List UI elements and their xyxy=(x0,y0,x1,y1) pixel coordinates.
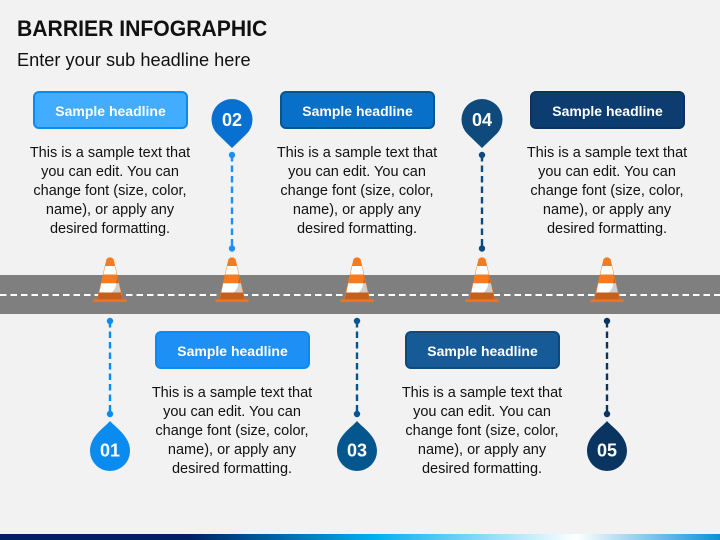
text block 5: change font (size, color, xyxy=(530,183,684,199)
headline box 3: Sample headline xyxy=(302,103,413,119)
text block 2 xyxy=(152,385,312,477)
text block 4: change font (size, color, xyxy=(405,423,559,439)
cone 1 xyxy=(93,257,127,302)
title: BARRIER INFOGRAPHIC xyxy=(17,16,267,41)
text block 1: you can edit. You can xyxy=(41,164,179,180)
road xyxy=(0,275,720,314)
text block 5: This is a sample text that xyxy=(527,145,687,161)
cone 2 xyxy=(215,257,249,302)
text block 4: desired formatting. xyxy=(422,461,542,477)
text block 5 xyxy=(527,145,688,237)
text block 3: name), or apply any xyxy=(293,202,421,218)
headline box 1 xyxy=(33,91,188,129)
headline box 3 xyxy=(280,91,435,129)
text block 5: you can edit. You can xyxy=(538,164,676,180)
text block 4: This is a sample text that xyxy=(402,385,562,401)
text block 2: you can edit. You can xyxy=(163,404,301,420)
headline box 4: Sample headline xyxy=(427,343,538,359)
text block 1: desired formatting. xyxy=(50,221,170,237)
text block 3 xyxy=(277,145,438,237)
text block 1 xyxy=(30,145,190,237)
headline box 2: Sample headline xyxy=(177,343,288,359)
marker 01: 01 xyxy=(100,440,120,460)
text block 2: This is a sample text that xyxy=(152,385,312,401)
cone 4 xyxy=(465,257,499,302)
text block 5: name), or apply any xyxy=(543,202,671,218)
cone 3 xyxy=(340,257,374,302)
marker 02: 02 xyxy=(222,110,242,130)
text block 2: desired formatting. xyxy=(172,461,292,477)
text block 2: name), or apply any xyxy=(168,442,296,458)
marker 05 xyxy=(587,421,627,471)
connector 04 xyxy=(479,152,485,252)
headline box 5 xyxy=(530,91,685,129)
text block 4 xyxy=(402,385,562,477)
text block 4: name), or apply any xyxy=(418,442,546,458)
text block 3: This is a sample text that xyxy=(277,145,437,161)
subtitle: Enter your sub headline here xyxy=(17,50,251,70)
text block 5: desired formatting. xyxy=(547,221,667,237)
text block 4: you can edit. You can xyxy=(413,404,551,420)
cone 5 xyxy=(590,257,624,302)
connector 02 xyxy=(229,152,235,252)
text block 3: change font (size, color, xyxy=(280,183,434,199)
connector 03 xyxy=(354,318,360,417)
marker 02 xyxy=(212,99,252,148)
text block 1: This is a sample text that xyxy=(30,145,190,161)
footer gradient bar xyxy=(0,534,720,540)
headline box 1: Sample headline xyxy=(55,103,166,119)
connector 01 xyxy=(107,318,113,417)
marker 01 xyxy=(90,421,130,471)
headline box 4 xyxy=(405,331,560,369)
marker 04: 04 xyxy=(472,110,492,130)
text block 2: change font (size, color, xyxy=(155,423,309,439)
connector 05 xyxy=(604,318,610,417)
headline box 5: Sample headline xyxy=(552,103,663,119)
text block 1: name), or apply any xyxy=(46,202,174,218)
text block 3: you can edit. You can xyxy=(288,164,426,180)
marker 04 xyxy=(461,99,502,148)
headline box 2 xyxy=(155,331,310,369)
marker 03: 03 xyxy=(347,440,367,460)
text block 1: change font (size, color, xyxy=(33,183,187,199)
text block 3: desired formatting. xyxy=(297,221,417,237)
marker 03 xyxy=(337,421,377,471)
marker 05: 05 xyxy=(597,440,617,460)
